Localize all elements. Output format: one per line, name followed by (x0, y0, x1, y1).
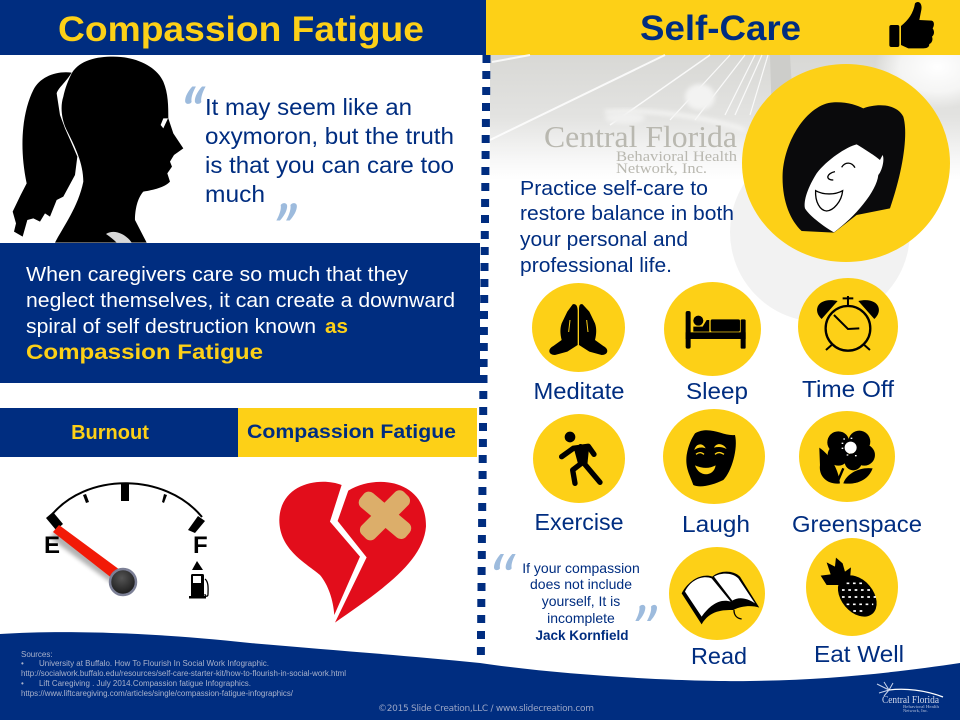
quote mark: opening small (494, 554, 516, 570)
text: practice self-care: your personal and (520, 228, 688, 251)
icon: comedy mask (686, 430, 736, 486)
panel: compassion fatigue definition: neglect themselves, it can create a downward (26, 289, 455, 312)
activity: time off: Time Off (802, 376, 894, 402)
icon: broken heart with bandage (279, 482, 426, 623)
quote text: much (205, 181, 265, 207)
logo: footer central florida: Network, Inc. (903, 708, 928, 714)
activity: exercise (533, 414, 625, 535)
icon: flower (819, 431, 875, 484)
quote text small: Jack Kornfield (535, 628, 629, 643)
text: sources: http://socialwork.buffalo.edu/resources/self-care-starter-kit/how-to-flourish-in-social-work.html (21, 669, 346, 678)
icon: thumbs up (889, 2, 934, 48)
divider: dotted line (477, 55, 490, 655)
silhouette: woman in profile (13, 57, 183, 243)
quote mark: opening (185, 87, 206, 104)
header: self-care (486, 0, 960, 55)
icon: smiling woman portrait (742, 64, 950, 262)
quote mark: closing small (635, 605, 657, 621)
activity: read: Read (691, 643, 747, 669)
icon: fuel gauge: F (193, 532, 208, 559)
text: sources: • (21, 659, 24, 668)
activity: time off (798, 278, 898, 402)
header: compassion fatigue: Compassion Fatigue (58, 10, 424, 49)
quote text small (522, 560, 640, 643)
quote mark: closing (276, 203, 297, 220)
panel: compassion fatigue definition: spiral of self destruction known (26, 315, 316, 338)
logo: central florida behavioral health network (544, 119, 738, 177)
panel: compassion fatigue definition: Compassion Fatigue (26, 340, 263, 364)
quote: jack kornfield (494, 554, 657, 643)
header: compassion fatigue (0, 0, 486, 55)
activity: eat well: Eat Well (814, 641, 904, 667)
icon: open book (682, 572, 759, 624)
panel: compassion fatigue definition: When caregivers care so much that they (26, 263, 409, 286)
logo: central florida behavioral health network: Behavioral Health (616, 149, 738, 165)
text: practice self-care: Practice self-care to (520, 177, 708, 200)
text: sources: Sources: (21, 650, 53, 659)
activity: meditate (532, 283, 625, 404)
panel: compassion fatigue definition: as (325, 316, 348, 338)
background: bridge photo (490, 55, 960, 180)
background: pale circle (730, 142, 910, 322)
quote text: is that you can care too (205, 152, 454, 178)
footer: navy wave (0, 632, 960, 720)
activity: greenspace (792, 411, 922, 537)
activity: sleep (664, 282, 761, 404)
logo: footer central florida (877, 682, 943, 714)
text: sources (21, 650, 346, 698)
quote text (205, 94, 454, 207)
quote text small: incomplete (547, 610, 615, 626)
quote text small: does not include (530, 576, 632, 592)
text: sources: • (21, 679, 24, 688)
activity: sleep: Sleep (686, 378, 748, 404)
icon: bed (686, 311, 746, 349)
icon: praying hands (549, 304, 607, 355)
logo: central florida behavioral health network: Network, Inc. (616, 161, 707, 177)
activity: laugh: Laugh (682, 511, 750, 537)
logo: footer central florida: Behavioral Health (903, 704, 939, 709)
quote text small: If your compassion (522, 560, 640, 576)
tab: compassion fatigue: Compassion Fatigue (247, 421, 456, 443)
icon: fuel gauge (44, 483, 208, 598)
activity: read (669, 547, 765, 669)
icon: alarm clock (817, 296, 879, 351)
activity: laugh (663, 409, 765, 537)
activity: greenspace: Greenspace (792, 511, 922, 537)
header: self-care: Self-Care (640, 9, 801, 48)
text: sources: https://www.liftcaregiving.com/articles/single/compassion-fatigue-infographics/ (21, 689, 294, 698)
text: sources: University at Buffalo. How To Flourish In Social Work Infographic. (39, 659, 269, 668)
panel: compassion fatigue definition (0, 243, 480, 383)
quote text: oxymoron, but the truth (205, 123, 454, 149)
logo: central florida behavioral health network: Central Florida (544, 119, 737, 154)
tab: burnout (0, 408, 238, 457)
activity: exercise: Exercise (534, 509, 624, 535)
text: practice self-care (520, 177, 734, 277)
quote text: It may seem like an (205, 94, 412, 120)
activity: eat well (806, 538, 904, 667)
text: sources: Lift Caregiving . July 2014.Compassion fatigue Infographics. (39, 679, 251, 688)
activity: meditate: Meditate (534, 378, 624, 404)
tab: burnout: Burnout (71, 422, 149, 444)
quote text small: yourself, It is (542, 593, 620, 609)
quote: can care too much (185, 87, 454, 220)
icon: fuel gauge: E (44, 532, 60, 559)
text: practice self-care: professional life. (520, 254, 672, 277)
icon: pineapple (821, 558, 885, 624)
text: copyright: ©2015 Slide Creation,LLC / www.slidecreation.com (378, 704, 594, 714)
tab: compassion fatigue (238, 408, 477, 457)
logo: footer central florida: Central Florida (882, 695, 940, 706)
text: practice self-care: restore balance in both (520, 202, 734, 225)
icon: walking figure (562, 432, 600, 483)
